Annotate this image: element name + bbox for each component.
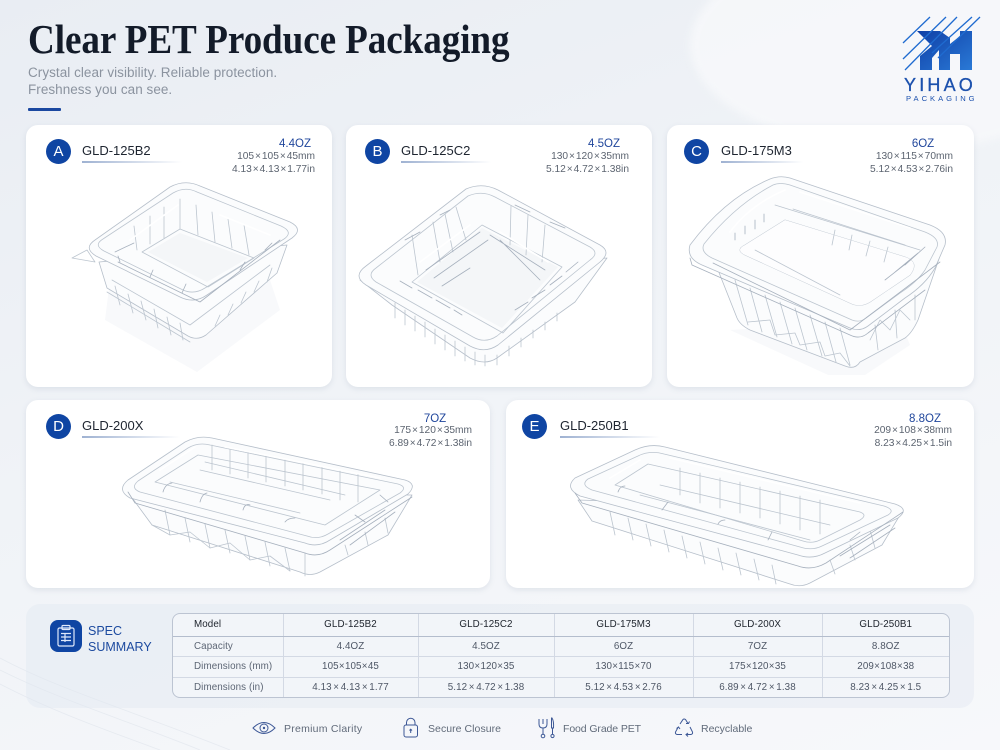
spec table: Model — [194, 619, 221, 630]
dimensions A — [232, 151, 315, 175]
icon: recycle arrows — [674, 718, 694, 737]
illustration: clamshell A — [72, 182, 298, 342]
dimensions D: 6.89 × 4.72 × 1.38in — [389, 438, 472, 449]
spec table: GLD-125C2 — [459, 619, 513, 630]
dimensions A: 4.13 × 4.13 × 1.77in — [232, 164, 315, 175]
spec table: 5.12 × 4.72 × 1.38 — [448, 682, 524, 693]
dimensions B: 130 × 120 × 35mm — [551, 151, 629, 162]
icon: eye — [252, 722, 276, 734]
dimensions C — [870, 151, 953, 175]
feature: secure closure — [404, 718, 501, 738]
panel: spec summary — [26, 604, 974, 708]
spec table: GLD-200X — [734, 619, 781, 630]
spec table: 8.23 × 4.25 × 1.5 — [850, 682, 921, 693]
capacity C: 6OZ — [912, 138, 934, 150]
badge B: B — [372, 143, 382, 160]
capacity A: 4.4OZ — [279, 138, 311, 150]
illustration: clamshell B — [358, 185, 608, 366]
dimensions E — [874, 425, 952, 449]
badge A: A — [53, 143, 64, 160]
subtitle: Crystal clear visibility. Reliable protection. — [28, 65, 277, 80]
badge C — [684, 139, 709, 164]
spec table: 130 × 120 × 35 — [458, 661, 514, 672]
badge E: E — [529, 418, 540, 435]
badge C: C — [691, 143, 702, 160]
dimensions E: 8.23 × 4.25 × 1.5in — [875, 438, 952, 449]
spec table: 105 × 105 × 45 — [322, 661, 379, 672]
feature: food grade PET — [538, 718, 641, 738]
logo mark — [902, 16, 980, 70]
capacity D: 7OZ — [424, 413, 446, 425]
title accent bar — [28, 108, 61, 111]
dimensions A: 105 × 105 × 45mm — [237, 151, 315, 162]
spec table: 4.4OZ — [337, 641, 364, 652]
spec table: 209 × 108 × 38 — [857, 661, 914, 672]
label: premium clarity: Premium Clarity — [284, 723, 362, 735]
title: Clear PET Produce Packaging — [28, 16, 509, 62]
panel: product A — [26, 125, 332, 387]
capacity E: 8.8OZ — [909, 413, 941, 425]
logo wordmark: YIHAO — [904, 75, 976, 95]
illustration: clamshell E — [570, 445, 904, 586]
subtitle: Freshness you can see. — [28, 82, 172, 96]
dimensions B: 5.12 × 4.72 × 1.38in — [546, 164, 629, 175]
feature: premium clarity — [252, 722, 362, 735]
spec table: 175 × 120 × 35 — [729, 661, 786, 672]
label: secure closure: Secure Closure — [428, 723, 501, 735]
badge E — [522, 414, 547, 439]
dimensions D: 175 × 120 × 35mm — [394, 425, 472, 436]
illustration: clamshell D — [122, 436, 413, 576]
badge D — [46, 414, 71, 439]
badge A — [46, 139, 71, 164]
model name B: GLD-125C2 — [401, 143, 470, 158]
spec table: 6OZ — [614, 641, 633, 652]
model name E: GLD-250B1 — [560, 418, 629, 433]
label: recyclable: Recyclable — [701, 723, 752, 735]
heading: spec summary: SPEC — [88, 624, 122, 638]
icon: lock — [404, 718, 418, 738]
capacity B: 4.5OZ — [588, 138, 620, 150]
logo: Yihao Packaging — [902, 16, 980, 103]
spec table: Dimensions (mm) — [194, 661, 272, 672]
panel: product E — [506, 400, 974, 588]
icon: fork and knife — [538, 718, 555, 738]
panel: product D — [26, 400, 490, 588]
spec table: 7OZ — [748, 641, 767, 652]
logo tagline: PACKAGING — [906, 94, 978, 103]
dimensions D — [389, 425, 472, 449]
subtitle — [28, 65, 277, 97]
feature: recyclable — [674, 718, 752, 737]
model name A: GLD-125B2 — [82, 143, 151, 158]
spec table: 5.12 × 4.53 × 2.76 — [585, 682, 662, 693]
spec table: 130 × 115 × 70 — [595, 661, 652, 672]
panel: product C — [667, 125, 974, 387]
heading: spec summary — [88, 624, 152, 654]
spec table: 6.89 × 4.72 × 1.38 — [719, 682, 796, 693]
panel: product B — [346, 125, 652, 387]
icon: clipboard — [50, 620, 82, 652]
heading: spec summary: SUMMARY — [88, 640, 152, 654]
badge D: D — [53, 418, 64, 435]
badge B — [365, 139, 390, 164]
spec table: 4.13 × 4.13 × 1.77 — [312, 682, 389, 693]
model name C: GLD-175M3 — [721, 143, 792, 158]
model name D: GLD-200X — [82, 418, 143, 433]
spec table: Dimensions (in) — [194, 682, 264, 693]
spec table — [172, 613, 950, 698]
dimensions E: 209 × 108 × 38mm — [874, 425, 952, 436]
dimensions C: 5.12 × 4.53 × 2.76in — [870, 164, 953, 175]
spec table: 8.8OZ — [872, 641, 900, 652]
dimensions B — [546, 151, 629, 175]
spec table: 4.5OZ — [472, 641, 500, 652]
spec table: Capacity — [194, 641, 233, 652]
spec table: GLD-125B2 — [324, 619, 377, 630]
dimensions C: 130 × 115 × 70mm — [876, 151, 953, 162]
spec table: GLD-250B1 — [859, 619, 912, 630]
spec table: GLD-175M3 — [596, 619, 651, 630]
label: food grade PET: Food Grade PET — [563, 723, 641, 735]
illustration: clamshell C — [688, 176, 946, 368]
